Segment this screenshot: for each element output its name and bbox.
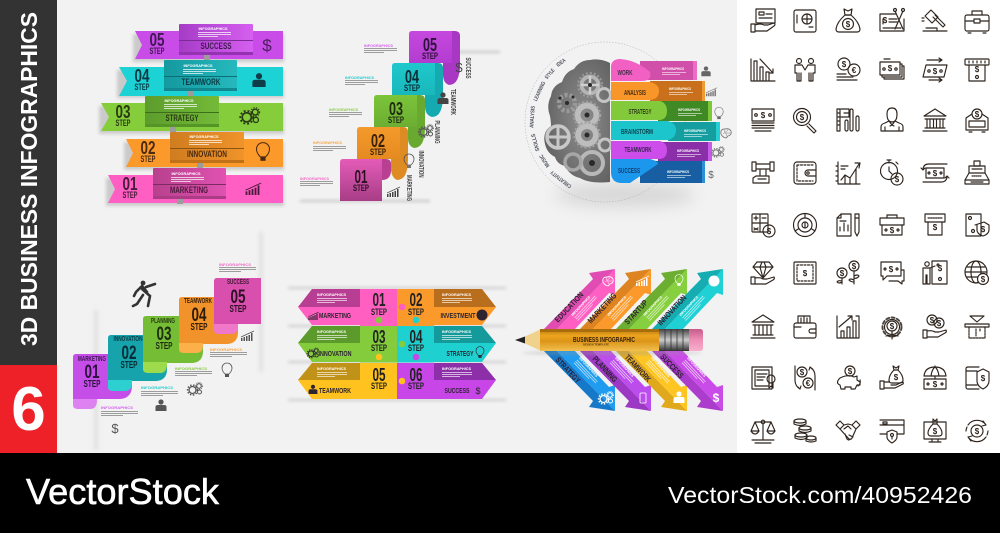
step 05: SUCCESS [227, 279, 249, 286]
icon: coin plants [837, 261, 859, 284]
step 02 fold: STEP [370, 147, 386, 158]
step 04 ribbon: INFOGRAPHICS [184, 64, 213, 68]
icon: briefcase with money: $ [890, 226, 895, 235]
icon: money bag on monitor [924, 419, 946, 442]
captions left: INFOGRAPHICS [329, 108, 359, 112]
step 01 [73, 354, 132, 409]
step 02 fold: 02 [371, 131, 385, 151]
icon: document shield: $ [981, 225, 986, 234]
icon: piggy bank [838, 366, 860, 389]
icon: coins in hand: $ [930, 316, 935, 325]
step 03 [143, 316, 203, 373]
icon: businessman [881, 108, 903, 131]
step 03 ribbon [101, 96, 283, 132]
arrow captions: INFOGRAPHICS [317, 330, 347, 334]
pencil: BUSINESS INFOGRAPHIC [573, 335, 635, 344]
icon: stack of bills: $ [888, 64, 893, 73]
pencil [515, 329, 703, 355]
arrow captions: INFOGRAPHICS [317, 367, 347, 371]
step 01: MARKETING [78, 356, 106, 363]
icon: currency exchange [795, 366, 815, 390]
circular word labels: STYLE [544, 68, 557, 81]
icon: stopwatch with coin [880, 160, 903, 185]
red count badge [0, 365, 57, 453]
step 03 ribbon: STRATEGY [166, 113, 198, 123]
icon: magnifier: $ [800, 113, 805, 122]
icon: umbrella over money: $ [933, 380, 938, 389]
captions left: INFOGRAPHICS [345, 76, 375, 80]
bar: work [611, 59, 697, 81]
bar: success: SUCCESS [618, 168, 640, 175]
puzzle numbers: STEP [408, 343, 424, 354]
bar: brainstorm [611, 121, 720, 141]
step 02 ribbon [126, 132, 283, 168]
step 04 [179, 297, 238, 353]
bar: strategy [611, 101, 712, 121]
icon: falling chart [751, 59, 775, 81]
puzzle numbers: 06 [410, 365, 422, 385]
step 04 fold: 04 [405, 67, 419, 87]
captions left: INFOGRAPHICS [300, 177, 330, 181]
step 05 ribbon: $ [262, 36, 272, 55]
icon: globe with coin: $ [981, 275, 986, 284]
arrow labels: MARKETING [586, 291, 618, 325]
step 04 ribbon: STEP [134, 82, 150, 93]
step icons [111, 331, 254, 436]
circular word labels: LEARNING [533, 81, 547, 102]
vertical labels and icons: $ [455, 60, 463, 75]
pencil: DESIGN TEMPLATE [583, 344, 609, 346]
step 05: 05 [230, 287, 246, 308]
icon: money chat [881, 262, 904, 284]
step 01 ribbon: STEP [122, 190, 138, 201]
captions left: INFOGRAPHICS [313, 141, 343, 145]
step 05: STEP [230, 304, 247, 315]
upper arrows [544, 269, 723, 329]
step 05 fold: 05 [423, 35, 437, 55]
icon: atm slot: $ [933, 223, 938, 232]
bar captions: INFOGRAPHICS [678, 108, 701, 112]
lower arrows [544, 351, 723, 411]
icon: presenter [923, 261, 947, 284]
icon: currency exchange: $ [800, 368, 805, 377]
step 05 ribbon: SUCCESS [200, 41, 232, 51]
arrow labels: STARTUP [623, 298, 650, 326]
title: 3D BUSINESS INFOGRAPHICS [16, 12, 42, 346]
icon: cash register [965, 161, 989, 184]
arrowhead icons: $ [713, 391, 720, 405]
bar: work: WORK [618, 70, 632, 77]
step 01 ribbon: MARKETING [170, 185, 208, 195]
circular word labels: SKILLS [531, 133, 541, 152]
circular word labels: ANALYSIS [529, 105, 537, 128]
icon: gavel in hand [752, 162, 774, 183]
arrow labels: INNOVATION [318, 349, 352, 358]
arrow captions: INFOGRAPHICS [578, 356, 599, 378]
step 02 ribbon: INFOGRAPHICS [190, 135, 219, 139]
icon: document shield [966, 214, 989, 236]
step 05 fold: STEP [422, 51, 438, 62]
step 02 [108, 335, 167, 391]
icon: coins in hand: $ [937, 319, 942, 328]
arrow labels: EDUCATION [553, 290, 586, 324]
step 03 ribbon: 03 [116, 102, 130, 122]
number 6: 6 [11, 375, 46, 444]
step 05 ribbon: 05 [150, 30, 164, 50]
image url: VectorStock.com/40952426 [668, 482, 972, 508]
arrow labels: INVESTMENT [440, 311, 476, 320]
icon: dollar and euro coins: € [852, 66, 857, 75]
panel: brain diagram [525, 42, 731, 207]
step 04 ribbon: 04 [134, 66, 150, 86]
arrow captions: INFOGRAPHICS [679, 295, 700, 317]
arrow labels: STRATEGY [446, 349, 474, 358]
vertical labels and icons [387, 58, 471, 201]
arrow captions: INFOGRAPHICS [607, 295, 628, 317]
step 05 fold [409, 31, 460, 85]
arrow captions: INFOGRAPHICS [317, 293, 347, 297]
icon: bill with arrows [923, 58, 947, 82]
icon: handshake [836, 421, 860, 440]
circular word labels: IDEA [556, 58, 567, 69]
icon: calculator and coin [752, 214, 775, 237]
icon: presenter: $ [938, 264, 943, 273]
step 02: 02 [122, 343, 136, 364]
step 03: PLANNING [151, 318, 175, 325]
icon: wallet [794, 162, 816, 184]
bar: analysis: ANALYSIS [624, 90, 646, 97]
icon: rising chart [837, 316, 859, 338]
bar: brainstorm: BRAINSTORM [621, 129, 653, 136]
step 03 fold [374, 95, 425, 148]
arrow captions: INFOGRAPHICS [686, 356, 707, 378]
bar: success [611, 159, 705, 183]
arrow labels: SUCCESS [444, 386, 470, 395]
icon: card insert [965, 316, 989, 338]
bar icons [701, 66, 731, 181]
step 05 ribbon: STEP [150, 46, 165, 57]
arrow labels: SUCCESS [658, 352, 686, 381]
captions left: INFOGRAPHICS [364, 44, 394, 48]
icon: certificate [752, 367, 775, 389]
step 03 ribbon: STEP [116, 118, 131, 129]
arrow captions: INFOGRAPHICS [650, 356, 671, 378]
captions: INFOGRAPHICS [210, 348, 243, 352]
dashed circle [525, 42, 685, 202]
icon: calculator and coin: $ [767, 227, 772, 236]
puzzle numbers: 02 [410, 290, 422, 310]
icon: coin chest: $ [975, 110, 980, 119]
step 04: 04 [192, 305, 207, 326]
step 03 fold: 03 [389, 99, 403, 119]
brain drop shadow [555, 183, 695, 207]
icon: document and pencil [837, 214, 859, 236]
icon grid [751, 8, 989, 443]
puzzle numbers: 01 [372, 290, 386, 310]
circular word labels: MUSIC [539, 153, 551, 168]
circular word labels: CREATIVITY [549, 169, 573, 189]
icon: piggy bank: $ [848, 367, 853, 376]
right arrows [434, 289, 496, 399]
arrow labels [307, 310, 488, 396]
puzzle numbers: STEP [408, 381, 424, 392]
icon: currency exchange: € [806, 379, 811, 388]
brand wordmark: VectorStock [26, 471, 220, 512]
icon: atm slot [925, 214, 945, 235]
arrow captions: INFOGRAPHICS [442, 367, 472, 371]
icon: coin plants: $ [852, 262, 857, 271]
arrow captions: INFOGRAPHICS [571, 295, 592, 317]
icon: briefcase [965, 11, 989, 33]
footer bar [0, 453, 1000, 533]
icon: coin piles [794, 419, 816, 442]
step 02 ribbon: STEP [140, 154, 156, 165]
step 01 fold: 01 [354, 167, 368, 187]
puzzle numbers: STEP [408, 307, 424, 318]
left arrows [298, 289, 360, 399]
arrowhead icons [598, 275, 720, 405]
arrow labels: STRATEGY [554, 356, 582, 385]
icon: wallet with cards [794, 316, 816, 338]
panel: ribbon steps [99, 24, 284, 206]
icon: two men [795, 58, 815, 81]
brain with gears [544, 59, 611, 182]
icon: coupon with scissors [880, 8, 904, 31]
icon: atm: $ [975, 65, 980, 74]
panel: puzzle with arrows [288, 287, 506, 401]
icon: coupon with scissors: $ [883, 16, 888, 25]
bar icons: $ [708, 170, 714, 181]
puzzle pieces [360, 289, 434, 399]
step 04 fold [392, 63, 443, 117]
step 01: STEP [84, 379, 101, 390]
panel: stepped ladder with runner [73, 232, 262, 450]
icon: gear with coin: $ [890, 322, 895, 331]
icon: bag in hand [880, 366, 903, 389]
arrow labels: PLANNING [591, 355, 619, 384]
icon: bill with refresh [921, 164, 949, 182]
icon: safe with dollar: $ [803, 269, 808, 278]
icon: running figure [133, 281, 155, 306]
icon: dollar and euro coins: $ [842, 60, 847, 69]
arrow captions: INFOGRAPHICS [614, 356, 635, 378]
arrow captions [571, 292, 709, 385]
background panel [57, 0, 737, 453]
step 03: 03 [156, 324, 172, 345]
arrow labels: $ [475, 386, 481, 396]
icon: banknote [752, 109, 774, 131]
icon: gavel [922, 10, 947, 31]
icon: globe with coin [965, 261, 988, 284]
step 04 ribbon: TEAMWORK [182, 77, 221, 87]
step 02 ribbon: INNOVATION [187, 149, 227, 159]
icon: money bag: $ [846, 20, 851, 29]
icon: coin cycle: $ [975, 427, 980, 436]
icon: phone with shield [966, 367, 989, 389]
step 05 [214, 278, 261, 334]
step 03 fold: STEP [388, 115, 404, 126]
icon: stack of bills [880, 59, 904, 79]
icon: card with shield [880, 420, 904, 443]
bar: teamwork [611, 141, 712, 161]
icon: safe with dollar [794, 262, 816, 284]
icon: bill with refresh: $ [933, 169, 938, 178]
bar captions: INFOGRAPHICS [684, 129, 707, 133]
step 01 ribbon: 01 [122, 174, 138, 194]
arrow captions: INFOGRAPHICS [643, 295, 664, 317]
icon: bag in hand: $ [894, 373, 899, 382]
bar captions: INFOGRAPHICS [677, 149, 700, 153]
step 04 ribbon [119, 60, 283, 96]
puzzle numbers [371, 290, 424, 392]
icon: bill with arrows: $ [933, 67, 938, 76]
icon: diamond in hand [751, 262, 774, 284]
arrow captions [317, 293, 472, 377]
icon: banknote: $ [761, 111, 766, 120]
icon: ruler and bars [837, 109, 859, 131]
icon: growth chart [836, 162, 860, 184]
step 02 ribbon: 02 [140, 138, 156, 158]
icon: umbrella over money [924, 366, 946, 389]
arrow captions: INFOGRAPHICS [442, 293, 472, 297]
bar: analysis [611, 81, 705, 101]
icon: briefcase with money [880, 215, 904, 235]
bar captions [662, 67, 708, 178]
icon: target dial [794, 214, 816, 236]
step 02: INNOVATION [114, 336, 142, 343]
arrow labels [553, 290, 689, 385]
arrow captions: INFOGRAPHICS [442, 330, 472, 334]
icon: money bag [836, 9, 860, 32]
step icons: $ [111, 421, 119, 436]
step 04: TEAMWORK [184, 298, 212, 305]
panel: pencil fishbone [515, 269, 723, 411]
icon: safe [794, 10, 816, 32]
icon: card in hand [751, 9, 775, 32]
step 02 fold [357, 127, 408, 180]
vertical labels and icons: INNOVATION [417, 150, 424, 178]
icon: coins in hand [923, 315, 946, 338]
step 01 fold: STEP [353, 183, 369, 194]
step 01 fold [340, 159, 391, 201]
step 01 ribbon [108, 168, 283, 204]
step 03 ribbon: INFOGRAPHICS [164, 99, 194, 103]
circular word labels [529, 58, 573, 189]
bar: strategy: STRATEGY [628, 109, 652, 116]
captions [101, 263, 256, 416]
arrow labels: INNOVATION [656, 293, 689, 327]
icon: money bag on monitor: $ [933, 427, 938, 436]
icon: scales [751, 420, 775, 443]
step 05 ribbon: INFOGRAPHICS [198, 27, 228, 31]
arrow labels: MARKETING [319, 311, 351, 320]
captions left [300, 44, 397, 186]
icon: bank building [751, 315, 775, 338]
icon: atm [965, 59, 989, 81]
arrow labels: TEAMWORK [623, 353, 653, 384]
puzzle numbers: 04 [410, 327, 422, 347]
icon: stopwatch with coin: $ [895, 175, 900, 184]
captions: INFOGRAPHICS [141, 386, 174, 390]
step 04 fold: STEP [404, 83, 420, 94]
step 02: STEP [120, 360, 138, 371]
icon: coin plants: $ [840, 269, 845, 278]
icon: coin chest [966, 109, 988, 132]
puzzle numbers: 05 [372, 365, 386, 385]
step 01: 01 [84, 362, 100, 383]
icon: phone with shield: $ [981, 374, 986, 383]
bar: teamwork: TEAMWORK [624, 147, 652, 154]
panel: staircase folded steps [300, 31, 500, 202]
step 03: STEP [156, 341, 173, 352]
captions: INFOGRAPHICS [101, 406, 134, 410]
icon: bank [923, 109, 947, 131]
icon: dollar and euro coins [837, 58, 860, 80]
icon: coin cycle [966, 420, 988, 442]
icon: money chat: $ [889, 265, 894, 274]
bar captions: INFOGRAPHICS [669, 87, 692, 91]
puzzle numbers: 03 [372, 327, 386, 347]
step 04: STEP [190, 322, 208, 333]
puzzle numbers: STEP [371, 307, 387, 318]
arrow labels: TEAMWORK [319, 386, 351, 395]
vertical labels and icons: PLANNING [433, 120, 440, 144]
icon: gear with coin [882, 318, 902, 339]
bar captions: INFOGRAPHICS [667, 170, 690, 174]
vertical labels and icons: SUCCESS [464, 58, 471, 79]
left title band [0, 0, 57, 365]
icon: magnifier [794, 108, 816, 133]
captions: INFOGRAPHICS [219, 263, 252, 267]
puzzle numbers: STEP [371, 381, 387, 392]
vertical labels and icons: MARKETING [405, 175, 412, 201]
vertical labels and icons: TEAMWORK [449, 89, 456, 115]
bar captions: INFOGRAPHICS [662, 67, 685, 71]
step 05 ribbon [135, 24, 283, 60]
step 01 ribbon: INFOGRAPHICS [172, 172, 201, 176]
icon column background [737, 0, 1000, 453]
puzzle numbers: STEP [371, 343, 387, 354]
captions: INFOGRAPHICS [175, 367, 208, 371]
